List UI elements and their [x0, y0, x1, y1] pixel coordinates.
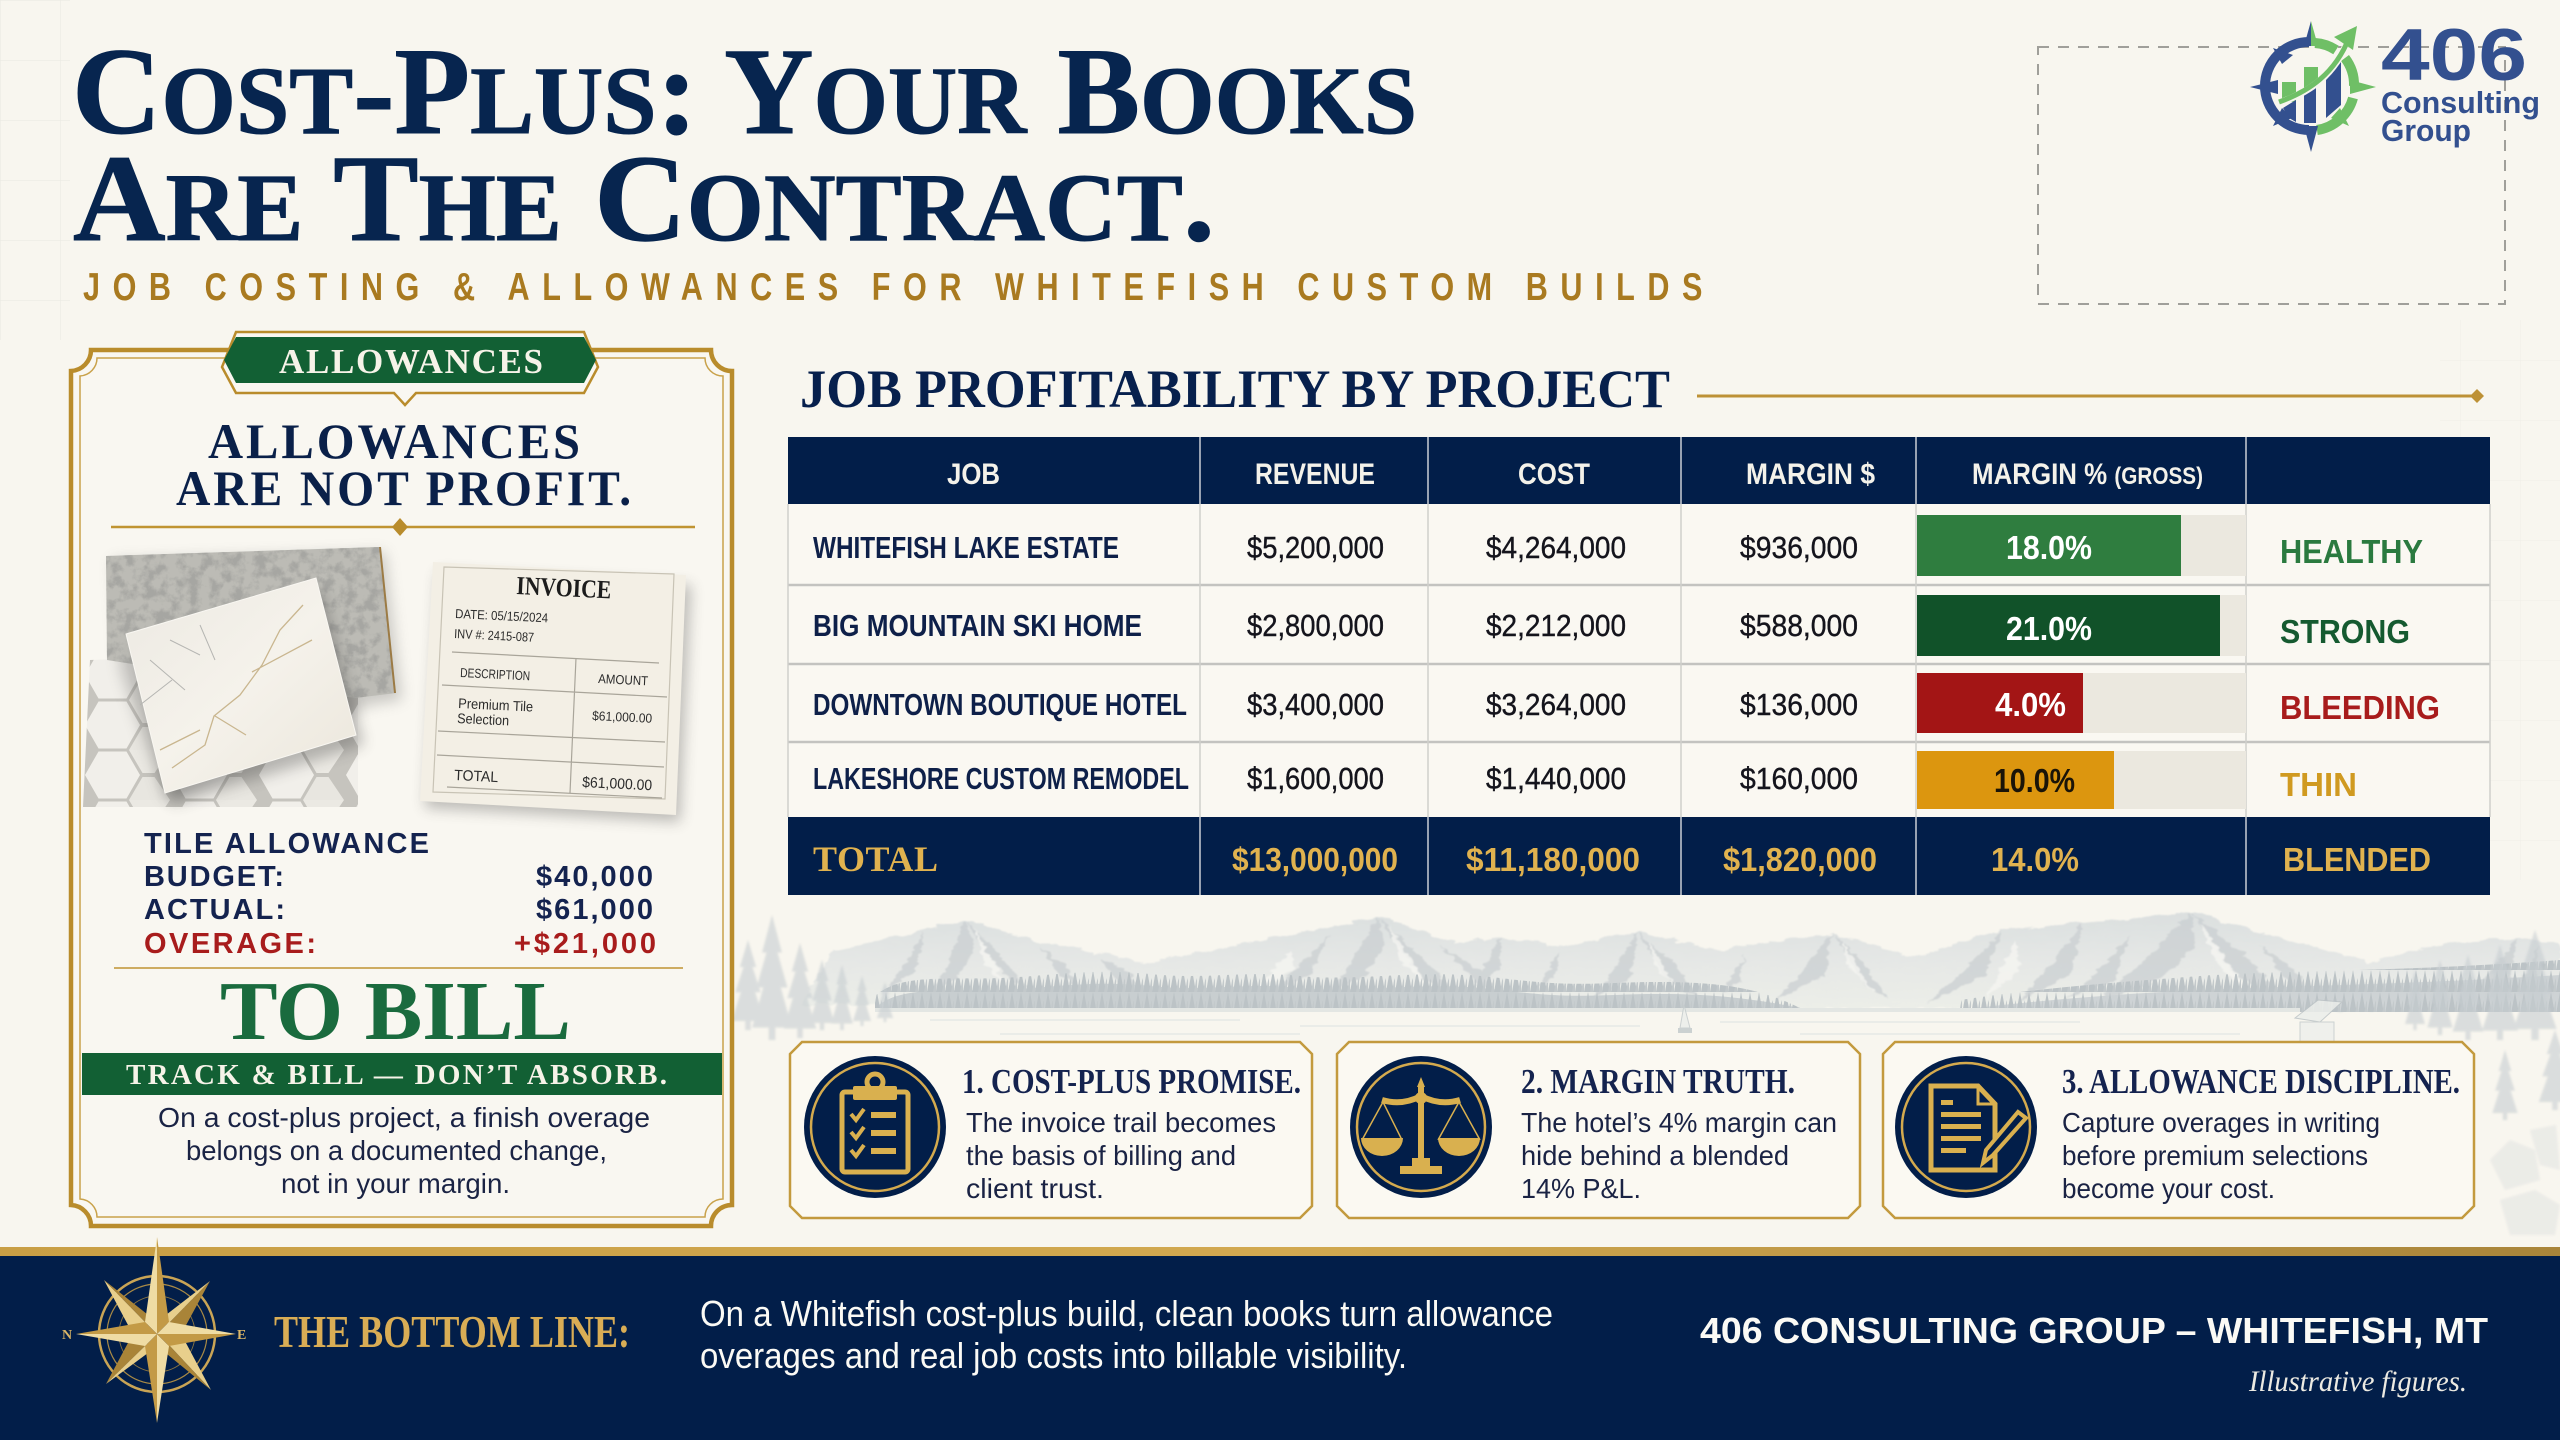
tile allowance figures: BUDGET: [144, 861, 284, 893]
table header row: MARGIN $ [1746, 458, 1875, 491]
footer message: overages and real job costs into billable visibility. [700, 1335, 1407, 1376]
card 2 text: 2. MARGIN TRUTH. [1521, 1062, 1795, 1101]
title [72, 23, 1417, 267]
card 2 text: 14% P&L. [1521, 1173, 1641, 1204]
allowance explanation [158, 1102, 650, 1199]
green strip: track and bill [82, 1053, 722, 1095]
subtitle: JOB COSTING & ALLOWANCES FOR WHITEFISH CUSTOM BUILDS [83, 266, 1715, 309]
table header row [947, 458, 2203, 491]
card 1 text: The invoice trail becomes [966, 1107, 1276, 1138]
photo: invoice: $61,000.00 [582, 774, 653, 794]
footer message: On a Whitefish cost-plus build, clean books turn allowance [700, 1293, 1553, 1334]
row: lakeshore custom remodel: $1,440,000 [1486, 761, 1626, 796]
icon: compass rose: N [62, 1328, 72, 1343]
total row: $1,820,000 [1723, 841, 1877, 878]
row: lakeshore custom remodel: 10.0% [1994, 762, 2075, 799]
row: whitefish lake estate: $5,200,000 [1247, 530, 1384, 565]
card 1 text: the basis of billing and [966, 1140, 1236, 1171]
row: lakeshore custom remodel: LAKESHORE CUSTOM REMODEL [813, 761, 1189, 796]
photo: invoice: Selection [457, 710, 510, 728]
row: downtown boutique hotel: $136,000 [1740, 687, 1858, 722]
table heading: JOB PROFITABILITY BY PROJECT [800, 359, 1670, 419]
logo: 406 Consulting Group [2250, 15, 2540, 152]
row: whitefish lake estate: 18.0% [2006, 529, 2092, 566]
row: whitefish lake estate: $936,000 [1740, 530, 1858, 565]
photo: invoice: $61,000.00 [592, 708, 652, 726]
footer label: the bottom line: THE BOTTOM LINE: [274, 1306, 630, 1357]
green strip: track and bill: TRACK & BILL — DON’T ABSORB. [126, 1059, 667, 1091]
icon: clipboard checklist [804, 1056, 946, 1198]
card 2: margin truth [1337, 1042, 1860, 1218]
photo: invoice: INV #: 2415-087 [454, 626, 534, 645]
panel: allowances [71, 332, 732, 1226]
table header row: REVENUE [1255, 458, 1375, 491]
card 1 text: client trust. [966, 1173, 1104, 1204]
row: big mountain ski home: 21.0% [2006, 610, 2092, 647]
row: whitefish lake estate: HEALTHY [2280, 533, 2423, 570]
photo: invoice: DESCRIPTION [460, 665, 530, 683]
photo: invoice [420, 562, 691, 822]
row: big mountain ski home: STRONG [2280, 613, 2410, 650]
allowance explanation: belongs on a documented change, [186, 1135, 607, 1166]
card 2 text: The hotel’s 4% margin can [1521, 1107, 1837, 1138]
photo: invoice: AMOUNT [598, 671, 649, 688]
tile allowance figures: OVERAGE: [144, 928, 316, 960]
photo: invoice: DATE: 05/15/2024 [455, 606, 548, 625]
total row: $11,180,000 [1466, 841, 1640, 878]
icon: compass rose [62, 1237, 246, 1423]
row: lakeshore custom remodel: THIN [2280, 766, 2357, 803]
footer firm name: 406 CONSULTING GROUP – WHITEFISH, MT [1700, 1310, 2488, 1351]
row: lakeshore custom remodel: $1,600,000 [1247, 761, 1384, 796]
banner: allowances [222, 332, 598, 405]
row: downtown boutique hotel: DOWNTOWN BOUTIQUE HOTEL [813, 687, 1187, 722]
table header row: MARGIN % (GROSS) [1972, 458, 2203, 491]
row: big mountain ski home: BIG MOUNTAIN SKI HOME [813, 608, 1142, 643]
logo: 406 Consulting Group: 406 [2381, 15, 2527, 96]
row: whitefish lake estate [813, 515, 2423, 576]
card 2 text [1521, 1062, 1837, 1204]
row: big mountain ski home [813, 595, 2410, 656]
icon: balance scales [1350, 1056, 1492, 1198]
row: big mountain ski home: $2,800,000 [1247, 608, 1384, 643]
photo: invoice: Premium Tile [458, 695, 534, 715]
footer band [0, 1237, 2560, 1440]
footer message [700, 1293, 1553, 1376]
card 3 text [2062, 1062, 2460, 1204]
panel heading [176, 413, 634, 516]
background: mountain lake landscape [732, 912, 2560, 1235]
to bill callout: TO BILL [220, 965, 571, 1058]
card 1: cost-plus promise [790, 1042, 1312, 1218]
card 3 text: become your cost. [2062, 1173, 2275, 1204]
card 3 text: 3. ALLOWANCE DISCIPLINE. [2062, 1062, 2460, 1101]
row: lakeshore custom remodel [813, 751, 2357, 809]
allowance explanation: On a cost-plus project, a finish overage [158, 1102, 650, 1133]
photo: invoice: TOTAL [454, 767, 499, 786]
row: downtown boutique hotel: $3,400,000 [1247, 687, 1384, 722]
icon: compass rose: E [237, 1328, 246, 1343]
card 2 text: hide behind a blended [1521, 1140, 1789, 1171]
total row: 14.0% [1991, 841, 2079, 878]
table: job profitability [788, 437, 2490, 895]
card 3 text: Capture overages in writing [2062, 1107, 2380, 1138]
tile allowance figures: TILE ALLOWANCE [144, 828, 429, 860]
tile allowance figures: ACTUAL: [144, 894, 285, 926]
row: whitefish lake estate: WHITEFISH LAKE ESTATE [813, 530, 1119, 565]
card 1 text [962, 1062, 1301, 1204]
table header row: JOB [947, 458, 1000, 491]
total row [813, 839, 2431, 879]
tile allowance figures: +$21,000 [514, 928, 656, 960]
panel heading: ARE NOT PROFIT. [176, 460, 634, 516]
card 3 text: before premium selections [2062, 1140, 2368, 1171]
icon: document and pen [1895, 1056, 2037, 1198]
row: downtown boutique hotel: BLEEDING [2280, 689, 2440, 726]
table header row: COST [1518, 458, 1590, 491]
side pine forests [732, 915, 2560, 1120]
row: downtown boutique hotel: 4.0% [1995, 686, 2066, 723]
row: big mountain ski home: $2,212,000 [1486, 608, 1626, 643]
tile allowance figures: $40,000 [536, 861, 653, 893]
title: COST-PLUS: YOUR BOOKS [72, 23, 1417, 160]
shoreline rocks [2490, 1125, 2560, 1235]
lodge and sailboat sketch [1678, 1000, 2342, 1042]
footer note: Illustrative figures. [2248, 1365, 2467, 1398]
allowance explanation: not in your margin. [281, 1168, 510, 1199]
dashed placeholder box [2038, 47, 2505, 304]
row: downtown boutique hotel: $3,264,000 [1486, 687, 1626, 722]
tile allowance figures [144, 828, 656, 960]
total row: $13,000,000 [1232, 841, 1398, 878]
card 1 text: 1. COST-PLUS PROMISE. [962, 1062, 1301, 1101]
banner: allowances: ALLOWANCES [279, 342, 543, 381]
row: whitefish lake estate: $4,264,000 [1486, 530, 1626, 565]
logo: 406 Consulting Group: Consulting [2381, 85, 2540, 120]
table heading [800, 359, 2484, 419]
tile allowance figures: $61,000 [536, 894, 653, 926]
logo: 406 Consulting Group: Group [2381, 113, 2471, 148]
total row: BLENDED [2283, 841, 2431, 878]
panel heading: ALLOWANCES [208, 413, 583, 469]
photo: invoice: INVOICE [516, 571, 612, 604]
row: big mountain ski home: $588,000 [1740, 608, 1858, 643]
total row: TOTAL [813, 839, 938, 879]
row: lakeshore custom remodel: $160,000 [1740, 761, 1858, 796]
photo: tile samples [83, 547, 402, 807]
row: downtown boutique hotel [813, 673, 2440, 733]
title: ARE THE CONTRACT. [73, 130, 1215, 267]
card 3: allowance discipline [1883, 1042, 2474, 1218]
treeline across the lake [875, 960, 2560, 1012]
